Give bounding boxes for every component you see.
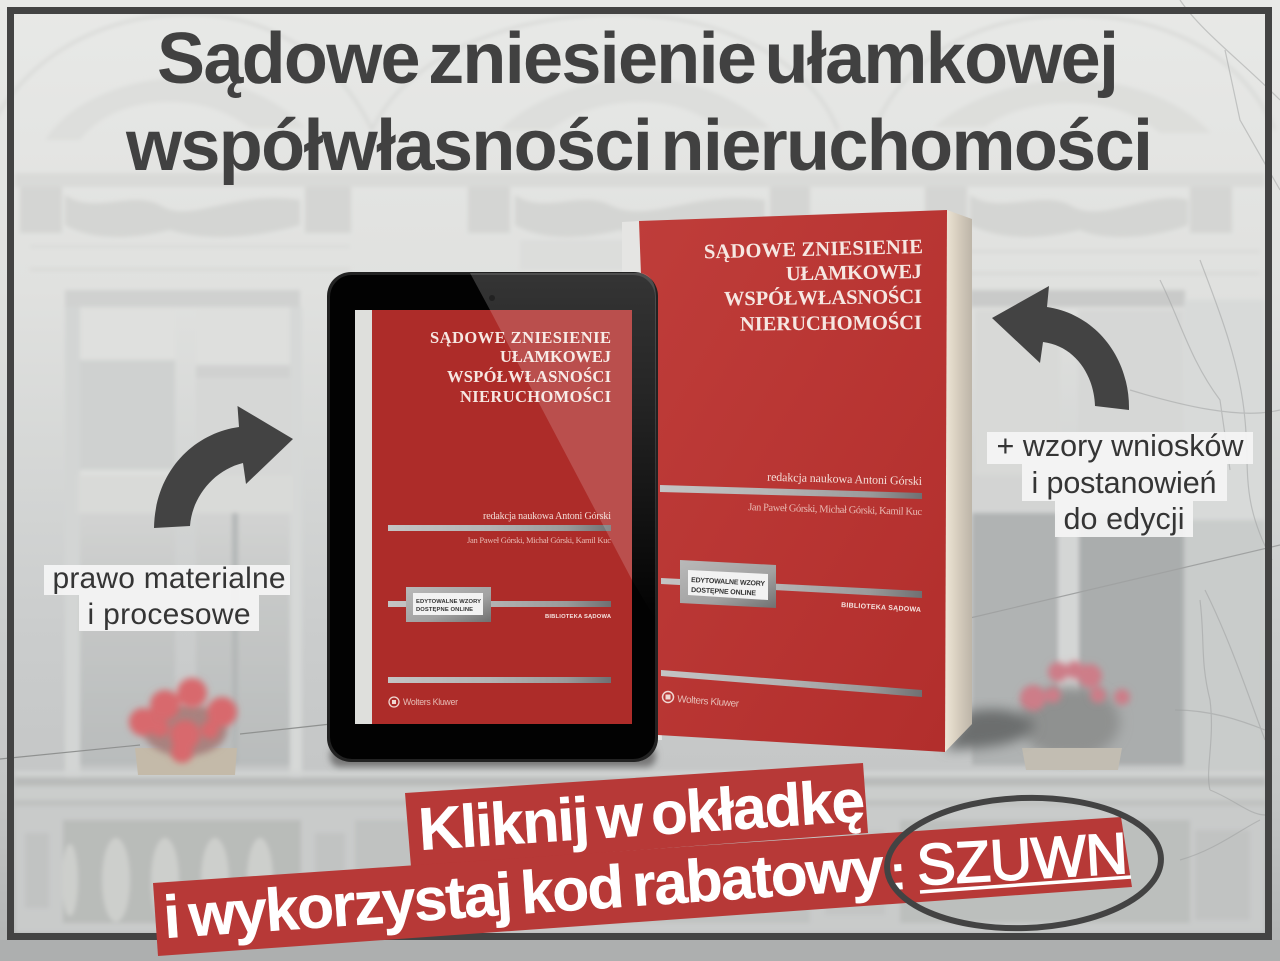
tablet screen — [355, 310, 632, 724]
arches — [0, 14, 1275, 150]
label: right: + wzory wniosków — [996, 429, 1244, 463]
label: left: i procesowe — [88, 598, 250, 631]
tablet screen glare — [490, 310, 632, 580]
book badge: DOSTĘPNE ONLINE — [691, 587, 757, 597]
tablet title — [430, 328, 611, 406]
bottom strip under frame — [0, 940, 1280, 961]
tablet shadow — [330, 745, 656, 767]
tablet title: NIERUCHOMOŚCI — [460, 387, 611, 406]
banner text line 1: Kliknij w okładkę — [416, 767, 867, 863]
code highlight ellipse — [885, 793, 1163, 933]
tablet bezel glare — [470, 273, 656, 620]
book bar bottom — [661, 670, 922, 697]
tablet badge: EDYTOWALNE WZORY — [416, 599, 481, 605]
lintel and frieze — [15, 173, 1265, 187]
book title — [704, 236, 923, 336]
tablet series label: BIBLIOTEKA SĄDOWA — [545, 614, 612, 620]
tablet camera — [489, 295, 495, 301]
code underline — [920, 877, 1131, 892]
balustrades — [63, 820, 301, 923]
tablet badge — [406, 587, 491, 622]
banner colon: : — [888, 844, 908, 901]
book cover — [639, 210, 947, 752]
title: współwłasności nieruchomości — [125, 106, 1153, 186]
banner text line 2: i wykorzystaj kod rabatowy — [161, 835, 887, 951]
tablet title: SĄDOWE ZNIESIENIE — [430, 328, 611, 347]
label: left — [44, 562, 290, 631]
tablet editor line: redakcja naukowa Antoni Górski — [483, 511, 611, 522]
book shadow — [945, 709, 1035, 750]
wires — [0, 723, 340, 759]
tree branches — [1130, 0, 1280, 860]
arrow: left curved to tablet — [154, 406, 293, 528]
label: left: prawo materialne — [52, 562, 286, 595]
book title: UŁAMKOWEJ — [786, 261, 922, 285]
book left strip — [622, 221, 662, 740]
tablet bar bottom — [388, 677, 611, 683]
book title: WSPÓŁWŁASNOŚCI — [724, 284, 922, 310]
book title: SĄDOWE ZNIESIENIE — [704, 236, 923, 263]
tablet — [327, 272, 658, 767]
tablet badge: DOSTĘPNE ONLINE — [416, 607, 473, 613]
tablet bar top — [388, 525, 611, 531]
book editor line: redakcja naukowa Antoni Górski — [767, 470, 923, 488]
label: right — [987, 429, 1253, 537]
tablet publisher: Wolters Kluwer — [403, 697, 458, 707]
book series label: BIBLIOTEKA SĄDOWA — [841, 602, 921, 614]
book badge: EDYTOWALNE WZORY — [691, 577, 765, 588]
tablet authors: Jan Paweł Górski, Michał Górski, Kamil Kuc — [467, 535, 611, 545]
label: right: i postanowień — [1032, 466, 1216, 500]
sills, cornice — [15, 771, 1265, 776]
banner line 2 — [153, 817, 1132, 956]
book pages — [945, 210, 972, 752]
title: Sądowe zniesienie ułamkowej — [157, 19, 1119, 99]
printed book — [622, 210, 1035, 752]
banner line 1 — [405, 763, 868, 867]
left flowers — [129, 678, 237, 775]
middle window top hints — [520, 240, 630, 270]
book badge — [680, 560, 776, 608]
label: right: do edycji — [1064, 502, 1184, 536]
book bar middle — [661, 578, 922, 598]
title — [125, 19, 1153, 186]
book publisher — [662, 692, 740, 710]
book bar top — [660, 485, 922, 499]
arrow: right curved to book — [992, 286, 1129, 410]
tablet title: UŁAMKOWEJ — [500, 347, 611, 366]
book authors: Jan Paweł Górski, Michał Górski, Kamil Kuc — [748, 502, 923, 518]
tablet bar middle — [388, 601, 611, 607]
discount code: SZUWN — [915, 821, 1129, 898]
left window — [65, 290, 300, 307]
tablet title: WSPÓŁWŁASNOŚCI — [447, 367, 611, 386]
book publisher: Wolters Kluwer — [677, 694, 740, 710]
book title: NIERUCHOMOŚCI — [740, 310, 922, 336]
tablet body — [327, 272, 658, 762]
call to action banner — [153, 763, 1132, 956]
right window — [970, 290, 1185, 307]
right flowers — [1020, 661, 1130, 770]
